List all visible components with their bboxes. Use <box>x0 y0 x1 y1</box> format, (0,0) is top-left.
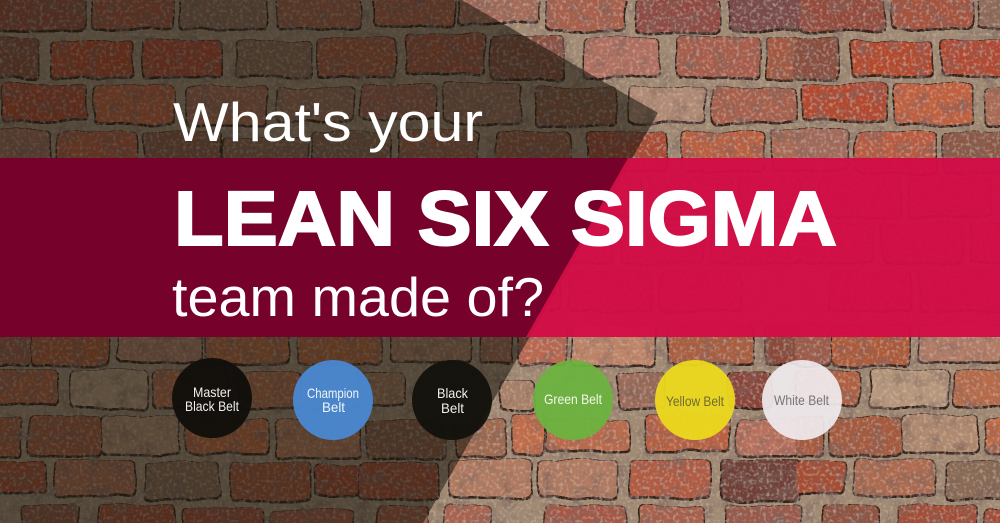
title: team made of?: team made of? <box>172 266 544 328</box>
belt: black belt <box>412 360 492 440</box>
belt: yellow belt <box>655 360 735 440</box>
title: lean six sigma: LEAN SIX SIGMA <box>174 176 837 262</box>
belt: green belt <box>533 360 613 440</box>
belt: white belt: White Belt <box>774 392 829 408</box>
belt: champion belt: Belt <box>322 399 345 415</box>
belt: green belt: Green Belt <box>544 391 602 407</box>
belt: master black belt: Master <box>193 384 231 400</box>
belt: champion belt <box>293 360 373 440</box>
belt: champion belt: Champion <box>307 385 359 401</box>
belt: black belt: Belt <box>441 400 464 416</box>
belt: black belt: Black <box>437 385 469 401</box>
belt: yellow belt: Yellow Belt <box>666 393 724 409</box>
dark triangular overlay <box>0 0 658 523</box>
title: what's your: What's your <box>173 91 483 153</box>
belt: master black belt: Black Belt <box>185 398 239 414</box>
belt: white belt <box>762 360 842 440</box>
crimson banner <box>0 158 1000 337</box>
belt: master black belt <box>172 358 252 438</box>
